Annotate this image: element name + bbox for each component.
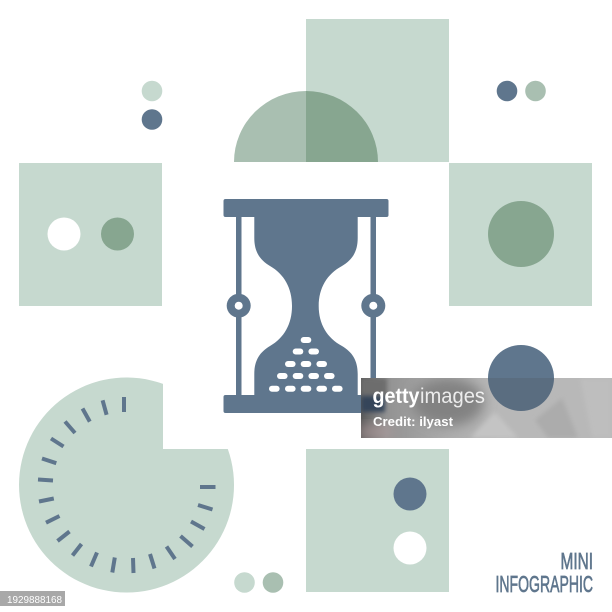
watermark band: Credit: ilyast xyxy=(373,415,454,429)
chart: clock dial with ticks xyxy=(19,378,234,593)
panel: right square with circle xyxy=(449,163,592,306)
panel: bottom square with two dots xyxy=(306,449,449,592)
watermark text: getty xyxy=(372,385,420,408)
icon: dots bottom xyxy=(234,572,283,593)
watermark band xyxy=(355,378,612,440)
icon: large dark circle top half xyxy=(488,345,554,378)
title: mini infographic: MINI xyxy=(560,548,593,574)
id badge: 1929888168 xyxy=(7,594,62,606)
watermark circle overlap xyxy=(488,378,554,411)
title: mini infographic xyxy=(496,548,593,597)
panel: top square with semicircle xyxy=(234,19,449,162)
icon: dots top left xyxy=(142,81,162,130)
sand grains xyxy=(269,337,343,392)
panel: left square with two dots xyxy=(19,163,162,306)
icon: hourglass xyxy=(224,199,388,413)
icon: dots top right xyxy=(497,81,546,101)
watermark band: images xyxy=(420,385,485,408)
